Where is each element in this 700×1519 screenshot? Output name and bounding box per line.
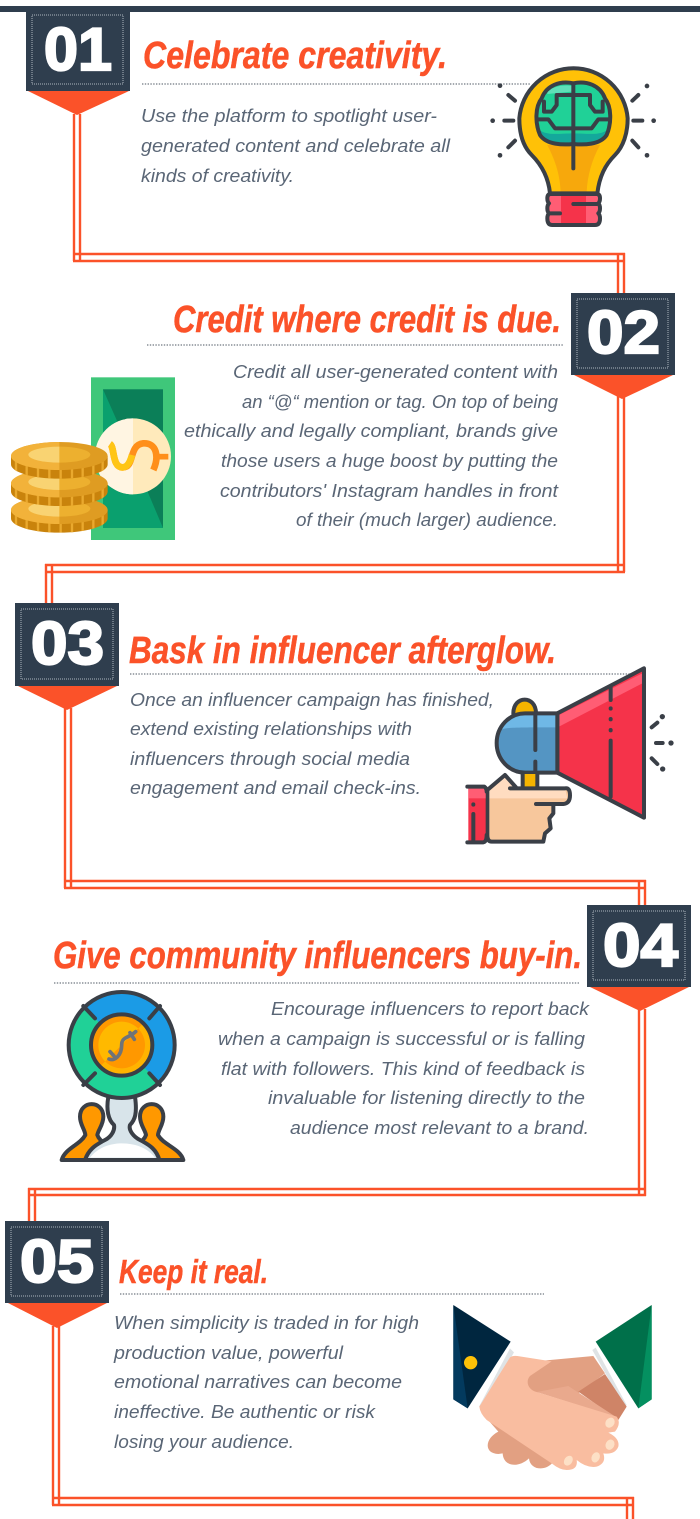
body text 1: generated content and celebrate all	[141, 136, 451, 156]
body text 2: Credit all user-generated content with	[233, 362, 558, 382]
icon: light bulb with brain	[490, 68, 656, 225]
icon: megaphone in hand	[467, 668, 674, 842]
heading 4: Give community influencers buy-in.	[53, 935, 582, 977]
icon: coins and banknote	[11, 377, 175, 540]
body text 5	[113, 1313, 419, 1452]
badge 05	[5, 1221, 109, 1328]
body text 1: Use the platform to spotlight user-	[141, 106, 437, 126]
body text 2: contributors' Instagram handles in front	[220, 481, 559, 501]
badge 04: 04	[603, 912, 679, 979]
badge 01: 01	[44, 16, 112, 83]
heading 3: Bask in influencer afterglow.	[129, 630, 556, 672]
heading 1: Celebrate creativity.	[143, 35, 447, 77]
badge 02	[571, 293, 675, 399]
panel: step 4 community influencers	[53, 905, 691, 1160]
body text 3: engagement and email check-ins.	[130, 778, 421, 798]
heading 2: Credit where credit is due.	[173, 299, 561, 341]
panel: step 5 keep it real	[5, 1221, 652, 1470]
body text 5: losing your audience.	[114, 1432, 294, 1452]
body text 4: Encourage influencers to report back	[271, 999, 590, 1019]
body text 5: ineffective. Be authentic or risk	[114, 1402, 376, 1422]
body text 4: audience most relevant to a brand.	[290, 1118, 589, 1138]
connector: step 3 to 4	[64, 708, 646, 906]
panel: step 2 credit where due	[11, 293, 675, 540]
body text 3: extend existing relationships with	[130, 719, 412, 739]
body text 3: influencers through social media	[130, 749, 410, 769]
connector: step 2 to 3	[45, 396, 625, 605]
body text 2: those users a huge boost by putting the	[221, 451, 558, 471]
body text 1: kinds of creativity.	[141, 166, 294, 186]
body text 4: flat with followers. This kind of feedback is	[221, 1059, 585, 1079]
badge 03	[15, 603, 119, 710]
body text 2: ethically and legally compliant, brands give	[184, 421, 558, 441]
body text 2	[184, 362, 559, 530]
body text 5: When simplicity is traded in for high	[114, 1313, 419, 1333]
heading 5: Keep it real.	[119, 1253, 268, 1290]
panel: step 1 celebrate creativity	[26, 11, 656, 225]
badge 04	[587, 905, 691, 1011]
panel: step 3 influencer afterglow	[15, 603, 674, 842]
connector: step 1 to 2	[73, 114, 625, 294]
badge 02: 02	[587, 299, 660, 366]
body text 5: emotional narratives can become	[114, 1372, 402, 1392]
body text 5: production value, powerful	[113, 1343, 344, 1363]
icon: handshake	[453, 1305, 652, 1470]
connector: step 5 onward	[52, 1326, 634, 1519]
top bar	[0, 6, 700, 12]
body text 4: invaluable for listening directly to the	[268, 1088, 585, 1108]
icon: coin target and audience	[62, 992, 183, 1160]
body text 2: an “@“ mention or tag. On top of being	[242, 392, 558, 412]
badge 05: 05	[20, 1228, 94, 1295]
body text 2: of their (much larger) audience.	[296, 510, 558, 530]
body text 4	[218, 999, 590, 1138]
badge 01	[26, 11, 130, 115]
body text 3: Once an influencer campaign has finished,	[130, 690, 494, 710]
body text 3	[130, 690, 494, 798]
badge 03: 03	[31, 610, 104, 677]
connector: step 4 to 5	[28, 1009, 646, 1222]
body text 1	[141, 106, 451, 186]
body text 4: when a campaign is successful or is falling	[218, 1029, 585, 1049]
